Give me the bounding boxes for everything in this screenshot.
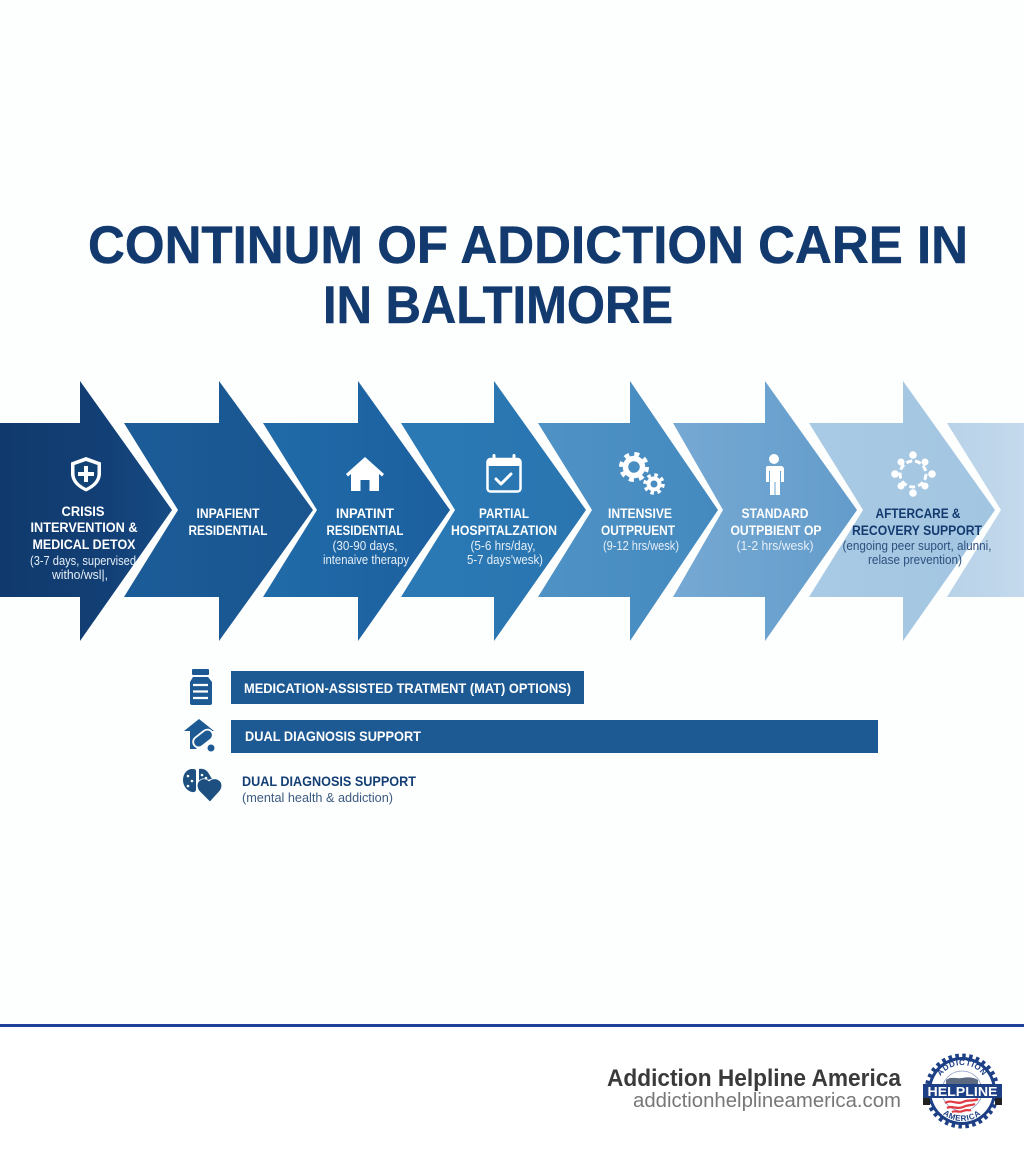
footer: brand text: Addiction Helpline America — [607, 1065, 902, 1092]
text: inpatient residential label — [188, 506, 268, 538]
text: crisis intervention — [30, 504, 138, 582]
icon: gears — [621, 454, 663, 493]
arrow: crisis intervention and medical detox — [0, 381, 172, 641]
title: IN BALTIMORE — [323, 276, 673, 335]
bar: medication-assisted treatment: MEDICATION-ASSISTED TRATMENT (MAT) OPTIONS) — [244, 680, 571, 696]
icon: house and pill — [184, 719, 215, 752]
arrow: aftercare and recovery support — [809, 381, 995, 641]
text: partial hospitalization: HOSPITALZATION — [451, 523, 557, 538]
arrow: trailing tail — [947, 423, 1024, 597]
footer: brand text — [607, 1065, 902, 1112]
title — [88, 216, 968, 335]
text: standard outpatient: OUTPBIENT OP — [730, 523, 822, 538]
text: crisis intervention: (3-7 days, supervised — [30, 554, 136, 568]
text: partial hospitalization — [451, 506, 557, 567]
text: inpatient residential — [323, 506, 410, 567]
icon: house — [346, 457, 384, 491]
arrow: inpatient residential — [124, 381, 313, 641]
arrow: intensive outpatient — [538, 381, 718, 641]
text: dual diagnosis support note: DUAL DIAGNOSIS SUPPORT — [242, 773, 416, 789]
text: aftercare: RECOVERY SUPPORT — [852, 523, 983, 538]
text: aftercare: (engoing peer suport, alunni, — [842, 539, 992, 553]
icon: medication bottle — [190, 669, 212, 705]
text: intensive outpatient: OUTPRUENT — [601, 523, 676, 538]
text: aftercare: relase prevention) — [868, 553, 962, 567]
text: partial hospitalization: 5-7 days'wesk) — [467, 553, 543, 567]
title: CONTINUM OF ADDICTION CARE IN — [88, 216, 968, 275]
text: intensive outpatient: INTENSIVE — [608, 506, 672, 521]
arrow: standard outpatient — [673, 381, 857, 641]
text: inpatient residential: (30-90 days, — [332, 539, 398, 553]
text: crisis intervention: MEDICAL DETOX — [32, 537, 136, 552]
text: dual diagnosis support note — [242, 773, 416, 805]
text: crisis intervention: INTERVENTION & — [30, 520, 138, 535]
logo: helpline seal: ADDICTION — [938, 1060, 986, 1076]
text: crisis intervention: CRISIS — [62, 504, 104, 519]
bar: medication-assisted treatment — [231, 671, 584, 704]
text: inpatient residential: INPATINT — [336, 506, 395, 521]
logo: helpline seal: AMERICA — [943, 1110, 981, 1122]
text: intensive outpatient: (9-12 hrs/wesk) — [603, 539, 679, 553]
text: inpatient residential label: INPAFIENT — [196, 506, 260, 521]
icon: person — [766, 454, 784, 495]
footer: brand text: addictionhelplineamerica.com — [633, 1090, 901, 1112]
bar: dual diagnosis support: DUAL DIAGNOSIS SUPPORT — [245, 728, 421, 744]
icon: support circle — [891, 451, 936, 497]
text: inpatient residential: intenaive therapy — [323, 553, 410, 567]
icon: brain and heart — [183, 769, 222, 802]
arrow: partial hospitalization — [401, 381, 586, 641]
text: partial hospitalization: (5-6 hrs/day, — [470, 539, 536, 553]
bar: dual diagnosis support — [231, 720, 878, 753]
text: standard outpatient: STANDARD — [742, 506, 809, 521]
text: partial hospitalization: PARTIAL — [479, 506, 529, 521]
text: standard outpatient — [730, 506, 822, 553]
text: intensive outpatient — [601, 506, 679, 553]
text: inpatient residential: RESIDENTIAL — [326, 523, 404, 538]
icon: calendar — [488, 456, 520, 492]
text: crisis intervention: witho/wsl|, — [51, 568, 108, 582]
arrow: inpatient residential with days — [263, 381, 450, 641]
text: aftercare — [842, 506, 992, 567]
text: inpatient residential label: RESIDENTIAL — [188, 523, 268, 538]
text: aftercare: AFTERCARE & — [876, 506, 961, 521]
icon: shield — [71, 457, 101, 492]
logo: helpline seal — [923, 1054, 1002, 1128]
text: standard outpatient: (1-2 hrs/wesk) — [736, 539, 814, 553]
logo: helpline seal: HELPLINE — [928, 1084, 998, 1099]
text: dual diagnosis support note: (mental health & addiction) — [242, 790, 393, 805]
